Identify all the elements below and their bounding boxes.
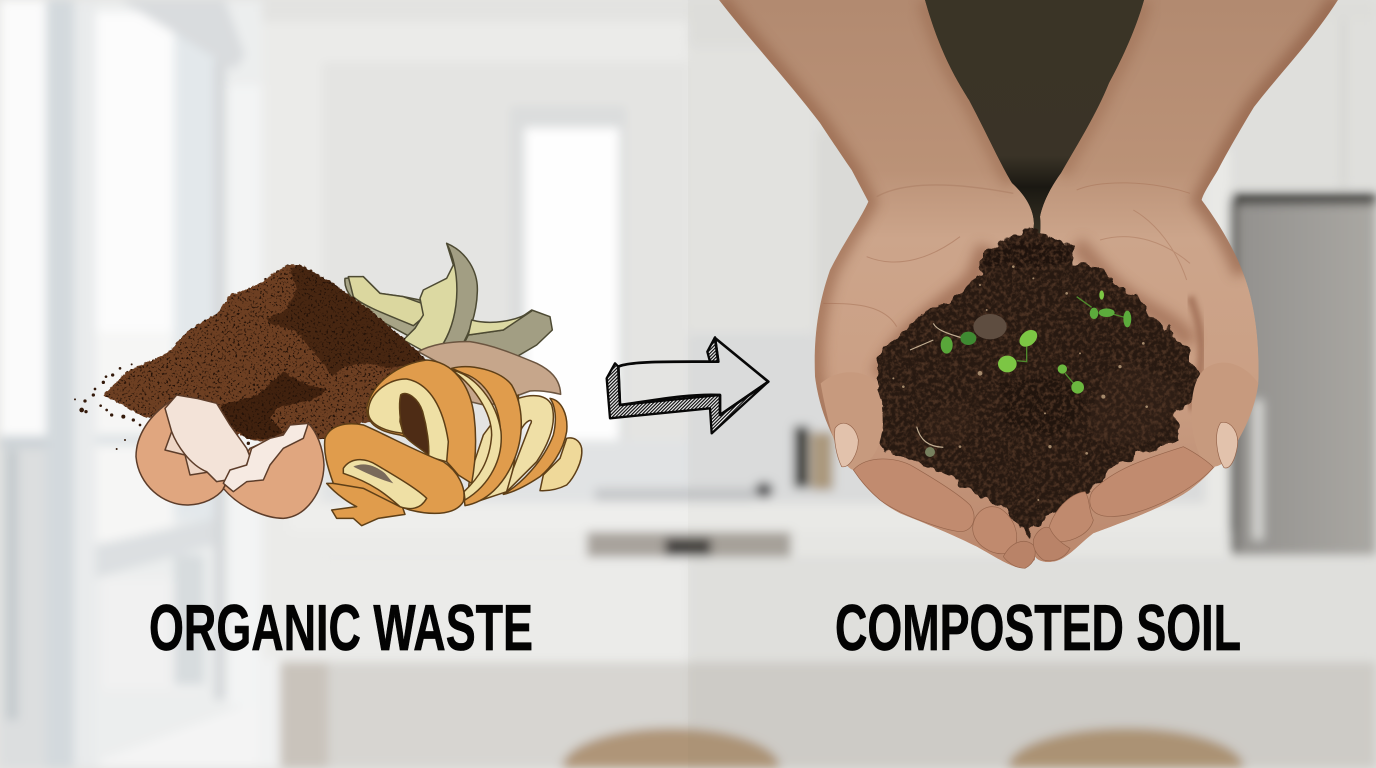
island counter (258, 558, 1376, 768)
fingers and thumbs (821, 363, 1258, 568)
right arm and hand (1033, 0, 1338, 562)
orange peel spiral (325, 360, 582, 526)
coffee grounds mound (103, 264, 427, 442)
left backsplash (322, 440, 688, 502)
left wall and ceiling (240, 0, 688, 680)
fridge (1230, 193, 1376, 555)
shirt behind arms (900, 0, 1170, 240)
seedlings (910, 290, 1131, 457)
left window frames and glass (0, 0, 262, 768)
arrow pointing right (607, 337, 768, 433)
right cabinets (688, 0, 1376, 510)
potato peel (418, 342, 561, 406)
counter items and stove (290, 426, 1231, 557)
vegetable peels (345, 243, 552, 357)
eggshells (136, 395, 324, 518)
bar stools (562, 728, 1244, 768)
cupped hands holding compost (719, 0, 1338, 568)
scattered grounds (74, 363, 419, 450)
soil specks (892, 265, 1148, 501)
compost soil (877, 230, 1200, 537)
illustration: organic waste pile (74, 243, 582, 526)
centre window (510, 106, 626, 476)
left arm and hand (719, 0, 1035, 568)
label: organic waste: ORGANIC WASTE (149, 591, 533, 664)
